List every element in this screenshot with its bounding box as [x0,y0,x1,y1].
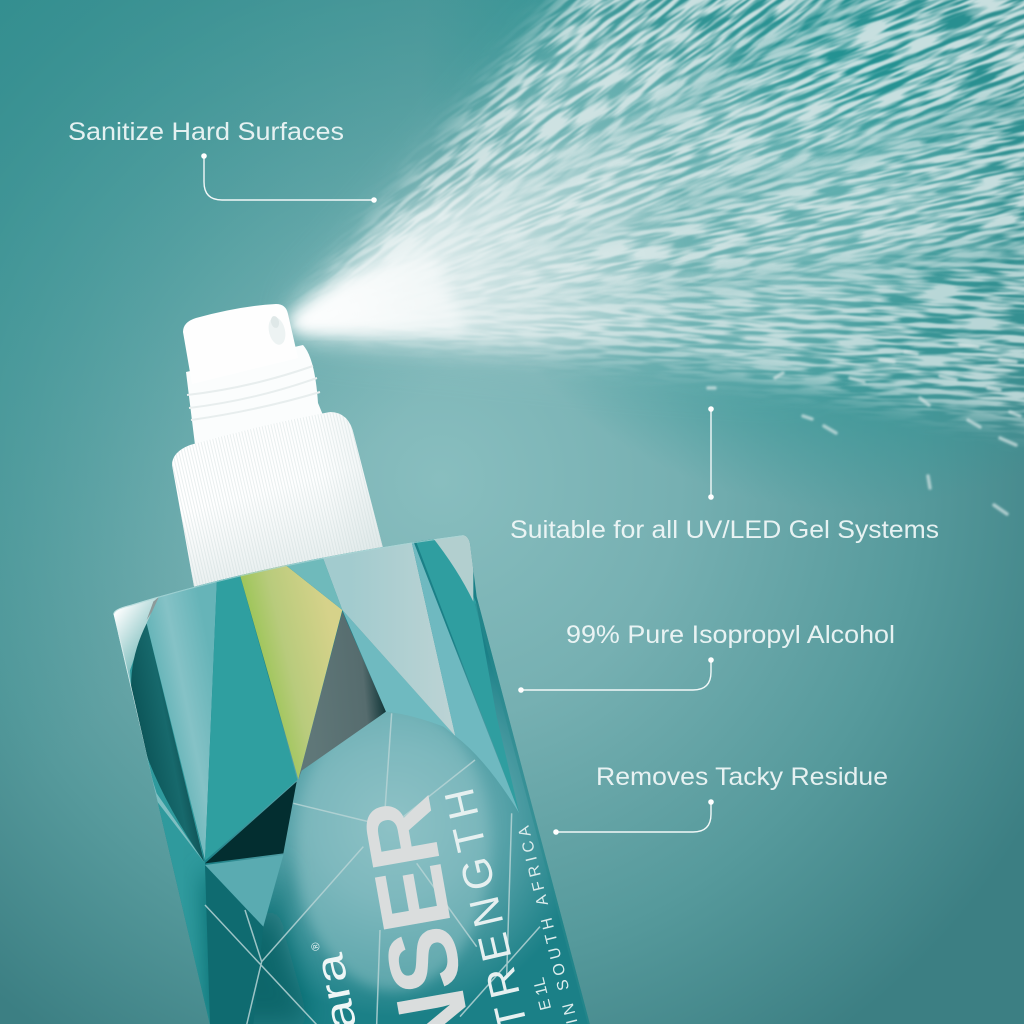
registered mark: ® [309,941,323,952]
callout: isopropyl alcohol [518,621,895,693]
streak field lower middle [452,80,1024,306]
soft glow around spray [293,20,1000,370]
facet: right teal [412,530,519,813]
facet: top right pale [434,535,474,602]
callout: removes tacky residue: Removes Tacky Residue [596,763,888,791]
streak field upper [298,0,888,303]
spray mist [278,0,1024,517]
facet: yellow green [237,557,342,779]
ribbed cap [172,412,383,592]
facet: mid teal [342,610,455,736]
facet: dark leaf [131,623,204,862]
callout: removes tacky residue [553,763,888,835]
label highlight [297,703,490,990]
origin text: IN SOUTH AFRICA [516,824,581,1025]
callout: sanitize hard surfaces: Sanitize Hard Surfaces [68,118,344,146]
bottle edge highlight [118,634,160,812]
spray core [288,120,680,347]
callout: sanitize hard surfaces [68,118,377,203]
callout: suitable for all gel systems [510,406,939,544]
facet: pale [320,530,455,736]
facet: teal [205,563,297,861]
facet: top teal [286,558,342,610]
label area [110,530,590,1025]
callout: isopropyl alcohol: 99% Pure Isopropyl Alcohol [566,621,895,649]
streak field lower [352,235,1024,442]
top rim highlight [113,535,463,613]
bottle body [110,530,590,1025]
pump actuator [183,304,325,445]
facet: teal triangle [205,855,283,927]
scattered droplets [708,345,1020,514]
facet: black triangle [205,782,297,863]
facet: grey [298,612,386,779]
size text: E 1L [531,976,555,1012]
spray bottle [110,304,590,1025]
label lines [205,713,540,1025]
nozzle jet [288,250,470,332]
right edge shadow [475,604,550,871]
left edge panel [130,636,210,1024]
facet: light [147,570,217,860]
facet: right light [409,530,519,813]
streak field upper middle [434,0,1024,274]
callout: suitable for all gel systems: Suitable for all UV/LED Gel Systems [510,516,939,544]
lower dark panel [205,855,310,1025]
